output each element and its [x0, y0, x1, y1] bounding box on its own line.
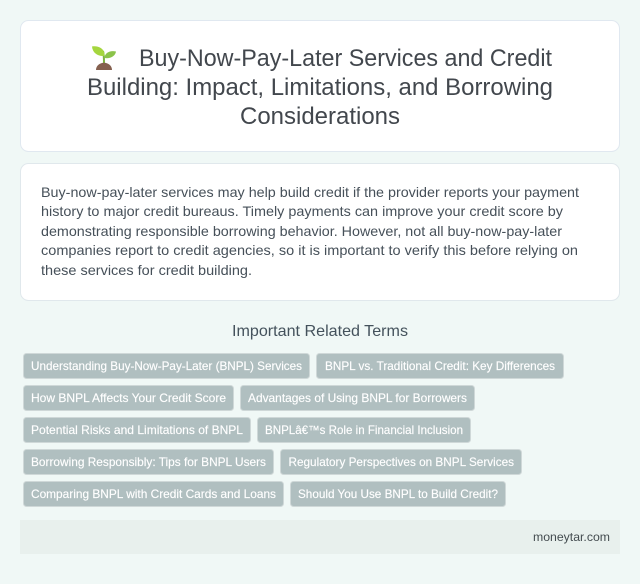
- tag: credit score: How BNPL Affects Your Credit Score: [31, 391, 226, 405]
- tag: borrowing responsibly: Borrowing Responsibly: Tips for BNPL Users: [31, 455, 266, 469]
- tag: regulatory perspectives: [280, 450, 522, 474]
- tag: BNPL vs traditional credit: BNPL vs. Traditional Credit: Key Differences: [325, 359, 555, 373]
- heading: related terms: Important Related Terms: [232, 323, 408, 340]
- tag: credit score: [24, 386, 234, 410]
- tag: advantages: [240, 386, 474, 410]
- tag: advantages: Advantages of Using BNPL for Borrowers: [248, 391, 467, 405]
- tag: comparing BNPL: Comparing BNPL with Credit Cards and Loans: [31, 487, 276, 501]
- tag: risks: [24, 418, 250, 442]
- tag: understanding BNPL: Understanding Buy-Now-Pay-Later (BNPL) Services: [31, 359, 302, 373]
- title: Considerations: [240, 103, 400, 130]
- tag: borrowing responsibly: [24, 450, 274, 474]
- description text: history to major credit bureaus. Timely payments can improve your credit score by: [41, 203, 563, 219]
- title: Buy-Now-Pay-Later Services and Credit: [139, 45, 552, 72]
- description text: Buy-now-pay-later services may help build credit if the provider reports your payment: [41, 184, 579, 200]
- tag: financial inclusion: BNPLâ€™s Role in Financial Inclusion: [265, 423, 463, 437]
- icon: seedling: [92, 46, 116, 70]
- description text: [41, 184, 579, 278]
- tag list: [24, 354, 564, 506]
- tag: should you use BNPL: Should You Use BNPL to Build Credit?: [298, 487, 498, 501]
- title: Building: Impact, Limitations, and Borrowing: [87, 74, 553, 101]
- description text: companies report to credit agencies, so it is important to verify this before relying on: [41, 242, 578, 258]
- description text: demonstrating responsible borrowing behavior. However, not all buy-now-pay-later: [41, 223, 562, 239]
- tag: financial inclusion: [258, 418, 470, 442]
- title: [87, 45, 553, 130]
- footer: [20, 520, 620, 554]
- description text: these services for credit building.: [41, 262, 252, 278]
- tag: regulatory perspectives: Regulatory Perspectives on BNPL Services: [288, 455, 514, 469]
- panel: description: [20, 164, 620, 300]
- panel: title card: [20, 20, 620, 152]
- footer source: moneytar.com: [533, 530, 610, 544]
- tag: BNPL vs traditional credit: [316, 354, 564, 378]
- tag: should you use BNPL: [290, 482, 506, 506]
- tag: risks: Potential Risks and Limitations of BNPL: [31, 423, 243, 437]
- tag: comparing BNPL: [24, 482, 284, 506]
- tag: understanding BNPL: [24, 354, 310, 378]
